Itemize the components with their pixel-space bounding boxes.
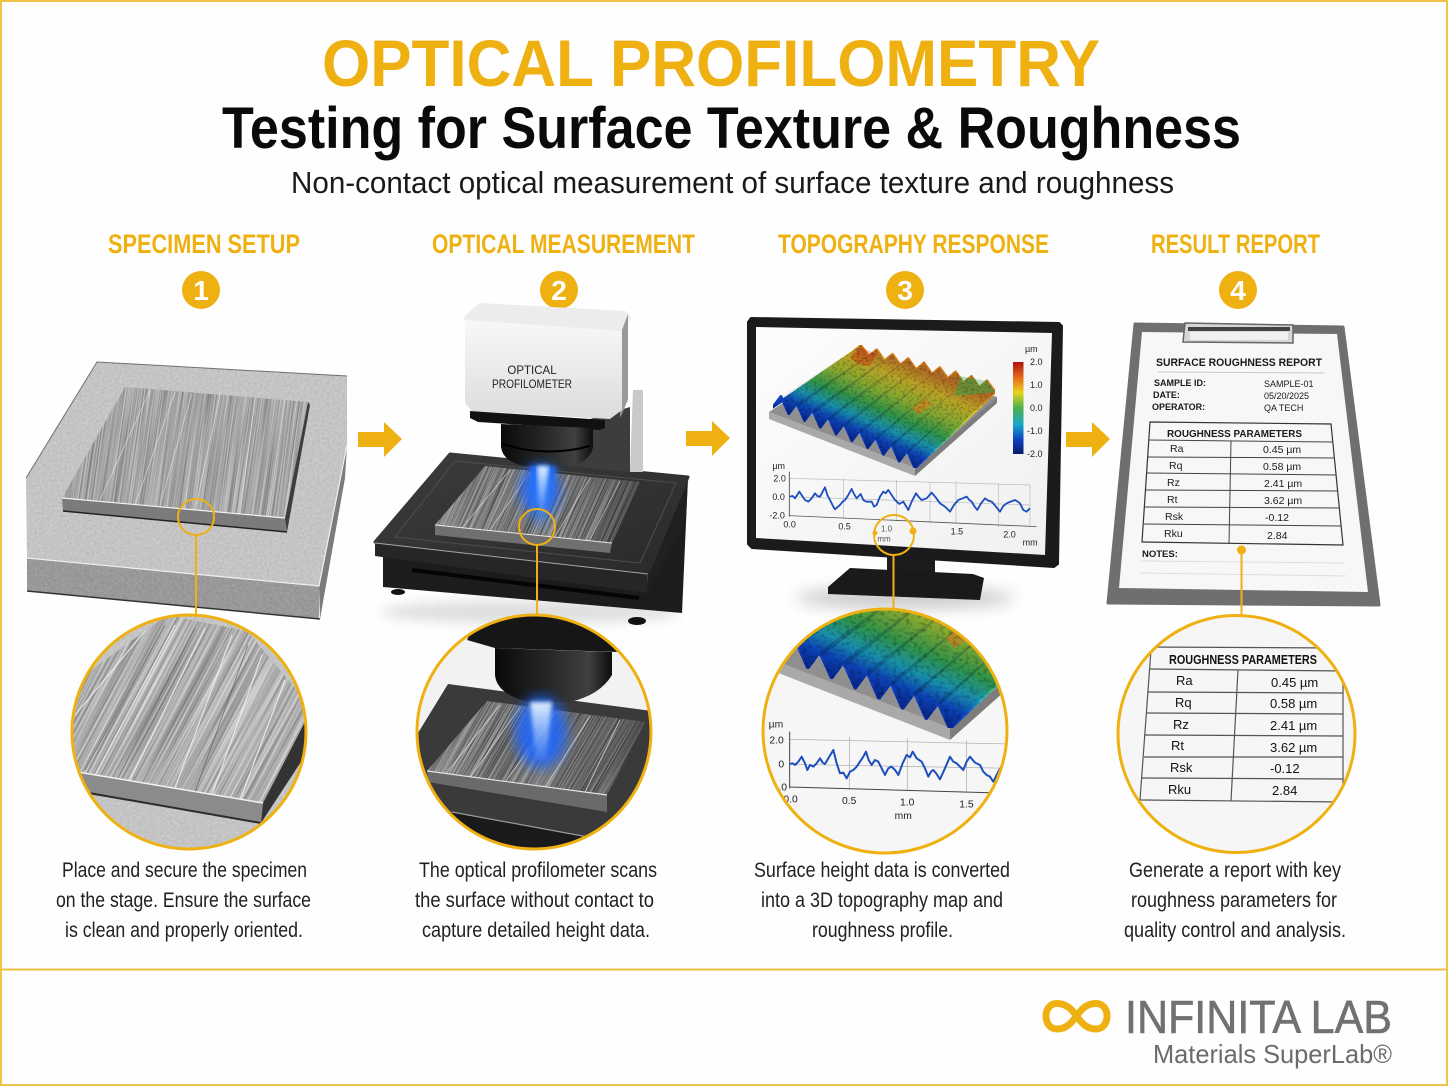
leader line bbox=[892, 555, 894, 612]
caption 3 bbox=[754, 859, 1010, 942]
caption 2: capture detailed height data. bbox=[422, 919, 650, 942]
sample metadata: DATE: bbox=[1153, 390, 1180, 400]
icon: infinity bbox=[1046, 1004, 1107, 1029]
caption 4: quality control and analysis. bbox=[1124, 919, 1346, 942]
report heading: SURFACE ROUGHNESS REPORT bbox=[1156, 357, 1322, 369]
logo bbox=[1046, 991, 1392, 1069]
magnified table text: 2.84 bbox=[1272, 783, 1297, 798]
specimen plate on stage bbox=[435, 525, 612, 553]
paper bbox=[1119, 332, 1368, 592]
caption 2 bbox=[415, 859, 657, 942]
specimen plate front and side bbox=[62, 498, 287, 532]
roughness table: 2.84 bbox=[1267, 530, 1288, 542]
magnified table text: Rq bbox=[1175, 695, 1192, 710]
monitor screen bbox=[756, 327, 1052, 555]
magnified table text: Rsk bbox=[1170, 760, 1193, 775]
instrument label: PROFILOMETER bbox=[492, 379, 572, 391]
step number 2: 2 bbox=[551, 275, 567, 306]
stage top bbox=[375, 454, 688, 573]
magnified table text: ROUGHNESS PARAMETERS bbox=[1169, 652, 1317, 667]
instrument label bbox=[492, 365, 572, 391]
illustration: specimen on stage bbox=[26, 362, 348, 620]
roughness table: Rt bbox=[1167, 494, 1178, 506]
caption 3: into a 3D topography map and bbox=[761, 889, 1003, 912]
roughness table: Rq bbox=[1169, 460, 1183, 472]
3D surface map bbox=[769, 345, 997, 476]
sample metadata: SAMPLE ID: bbox=[1154, 378, 1206, 388]
step heading 3: TOPOGRAPHY RESPONSE bbox=[778, 229, 1049, 259]
roughness table: Rku bbox=[1164, 528, 1183, 540]
base shadow bbox=[380, 600, 680, 624]
colour scale: -2.0 bbox=[1027, 449, 1043, 459]
colour scale bbox=[1013, 344, 1043, 459]
step heading 2: OPTICAL MEASUREMENT bbox=[432, 229, 695, 259]
black mount bbox=[470, 411, 605, 430]
lower base bbox=[383, 477, 688, 613]
leader line bbox=[536, 545, 538, 616]
logo wordmark: INFINITA LAB bbox=[1125, 991, 1392, 1043]
subtitle: Testing for Surface Texture & Roughness bbox=[222, 96, 1241, 161]
roughness table: Rsk bbox=[1165, 511, 1184, 523]
magnified profile chart bbox=[769, 719, 1008, 822]
roughness table: -0.12 bbox=[1265, 512, 1289, 524]
magnified circle: topography and profile bbox=[762, 608, 1008, 854]
stage front face bbox=[27, 558, 319, 618]
caption 1: Place and secure the specimen bbox=[62, 859, 307, 882]
magnified table text bbox=[1168, 652, 1318, 798]
magnified table text: 0.58 µm bbox=[1270, 696, 1317, 711]
magnified circle: brushed specimen bbox=[70, 614, 308, 850]
magnifier ring on instrument bbox=[519, 509, 555, 545]
step number 3 bbox=[886, 271, 924, 309]
roughness table: 3.62 µm bbox=[1264, 495, 1302, 507]
caption 1 bbox=[56, 859, 311, 942]
sample metadata: 05/20/2025 bbox=[1264, 391, 1309, 401]
stage front bbox=[375, 542, 648, 593]
magnified profile chart: 1.0 bbox=[900, 798, 915, 809]
logo tagline: Materials SuperLab® bbox=[1153, 1039, 1392, 1069]
roughness profile chart: 2.0 bbox=[773, 473, 786, 483]
step number 1: 1 bbox=[193, 275, 209, 306]
footer divider bbox=[0, 968, 1448, 970]
magnified profile chart: mm bbox=[895, 811, 912, 822]
monitor stand bbox=[887, 556, 935, 578]
step heading 4: RESULT REPORT bbox=[1151, 229, 1320, 259]
arrow 2 to 3 bbox=[686, 421, 730, 456]
magnifier ring on monitor bbox=[872, 515, 916, 555]
magnified table text: Rt bbox=[1171, 738, 1184, 753]
caption 4: Generate a report with key bbox=[1129, 859, 1341, 882]
magnified table text: 3.62 µm bbox=[1270, 740, 1317, 755]
magnified profile chart: .0 bbox=[778, 783, 787, 794]
colour scale: 1.0 bbox=[1030, 380, 1043, 390]
illustration: clipboard report bbox=[1108, 323, 1379, 617]
clipboard clip bbox=[1183, 323, 1293, 343]
magnified profile chart: 1.5 bbox=[959, 800, 974, 811]
sample metadata: QA TECH bbox=[1264, 403, 1303, 413]
magnified table text: Rz bbox=[1173, 717, 1189, 732]
roughness profile chart bbox=[769, 461, 1038, 547]
roughness profile chart: 2.0 bbox=[1003, 529, 1016, 539]
stage top face bbox=[26, 362, 347, 586]
magnified 3D surface bbox=[779, 610, 1000, 740]
roughness profile chart: 1.0 bbox=[881, 524, 893, 533]
measuring head front bbox=[465, 320, 622, 419]
step number 2 bbox=[540, 271, 578, 309]
blue light beam bbox=[520, 464, 560, 530]
step number 4 bbox=[1219, 271, 1257, 309]
magnified profile chart: µm bbox=[769, 719, 783, 730]
caption 4 bbox=[1124, 859, 1346, 942]
sample metadata bbox=[1152, 378, 1314, 413]
caption 1: on the stage. Ensure the surface bbox=[56, 889, 311, 912]
roughness table: 0.45 µm bbox=[1263, 444, 1301, 456]
colour scale: 2.0 bbox=[1030, 357, 1043, 367]
caption 1: is clean and properly oriented. bbox=[65, 919, 303, 942]
magnified profile chart: 0.5 bbox=[842, 796, 857, 807]
colour scale: µm bbox=[1025, 344, 1038, 354]
roughness table: 2.41 µm bbox=[1264, 478, 1302, 490]
magnified profile chart: 0 bbox=[778, 760, 784, 771]
column bbox=[567, 407, 630, 472]
caption 3: Surface height data is converted bbox=[754, 859, 1010, 882]
lens bbox=[501, 424, 593, 466]
caption 2: The optical profilometer scans bbox=[419, 859, 657, 882]
roughness profile chart: 0.0 bbox=[783, 519, 796, 529]
roughness profile chart: -2.0 bbox=[769, 511, 785, 521]
monitor bezel bbox=[748, 318, 1062, 567]
magnified table text: 2.41 µm bbox=[1270, 718, 1317, 733]
step number 3: 3 bbox=[897, 275, 913, 306]
monitor stand shadow bbox=[795, 588, 1015, 608]
magnified circle: roughness table bbox=[1118, 616, 1355, 852]
roughness table: 0.58 µm bbox=[1263, 461, 1301, 473]
magnified table text: -0.12 bbox=[1270, 761, 1300, 776]
title: OPTICAL PROFILOMETRY bbox=[322, 26, 1100, 100]
magnified profile chart: 2.0 bbox=[769, 735, 784, 746]
roughness profile chart: µm bbox=[772, 461, 785, 471]
illustration: monitor with 3D topography bbox=[748, 318, 1062, 612]
step number 1 bbox=[182, 271, 220, 309]
magnifier ring on specimen bbox=[178, 499, 214, 535]
caption 4: roughness parameters for bbox=[1131, 889, 1337, 912]
illustration: optical profilometer instrument bbox=[374, 303, 690, 627]
tagline: Non-contact optical measurement of surface texture and roughness bbox=[291, 165, 1174, 200]
magnified table text: Rku bbox=[1168, 782, 1191, 797]
roughness profile chart: 0.0 bbox=[772, 492, 785, 502]
arrow 3 to 4 bbox=[1066, 422, 1110, 457]
measuring head top bbox=[465, 304, 630, 331]
roughness profile chart: 0.5 bbox=[838, 522, 851, 532]
leader line bbox=[195, 535, 197, 616]
colour scale: 0.0 bbox=[1030, 403, 1043, 413]
instrument label: OPTICAL bbox=[507, 365, 557, 377]
roughness table: Rz bbox=[1167, 477, 1180, 489]
connector dot and leader line bbox=[1237, 546, 1246, 617]
specimen plate brushed surface bbox=[62, 387, 308, 518]
magnified table text: Ra bbox=[1176, 673, 1193, 688]
magnified circle: lens over specimen bbox=[416, 614, 652, 850]
step number 4: 4 bbox=[1230, 275, 1246, 306]
roughness profile chart: 1.5 bbox=[951, 527, 963, 537]
colour scale: -1.0 bbox=[1027, 426, 1043, 436]
roughness table: Ra bbox=[1170, 443, 1184, 455]
magnified profile chart: 0.0 bbox=[783, 794, 798, 805]
sample metadata: OPERATOR: bbox=[1152, 402, 1205, 412]
sample metadata: SAMPLE-01 bbox=[1264, 379, 1314, 389]
arrow 1 to 2 bbox=[358, 422, 402, 457]
roughness profile chart: mm bbox=[1023, 537, 1038, 547]
roughness profile chart: mm bbox=[877, 535, 891, 544]
magnified table text: 0.45 µm bbox=[1271, 675, 1318, 690]
roughness table: ROUGHNESS PARAMETERS bbox=[1167, 428, 1302, 440]
measuring head side bbox=[620, 314, 628, 418]
caption 3: roughness profile. bbox=[812, 919, 953, 942]
notes: NOTES: bbox=[1142, 549, 1178, 560]
step heading 1: SPECIMEN SETUP bbox=[108, 229, 300, 259]
roughness table bbox=[1142, 422, 1343, 545]
clipboard board bbox=[1108, 324, 1379, 605]
notes bbox=[1140, 549, 1346, 576]
caption 2: the surface without contact to bbox=[415, 889, 654, 912]
